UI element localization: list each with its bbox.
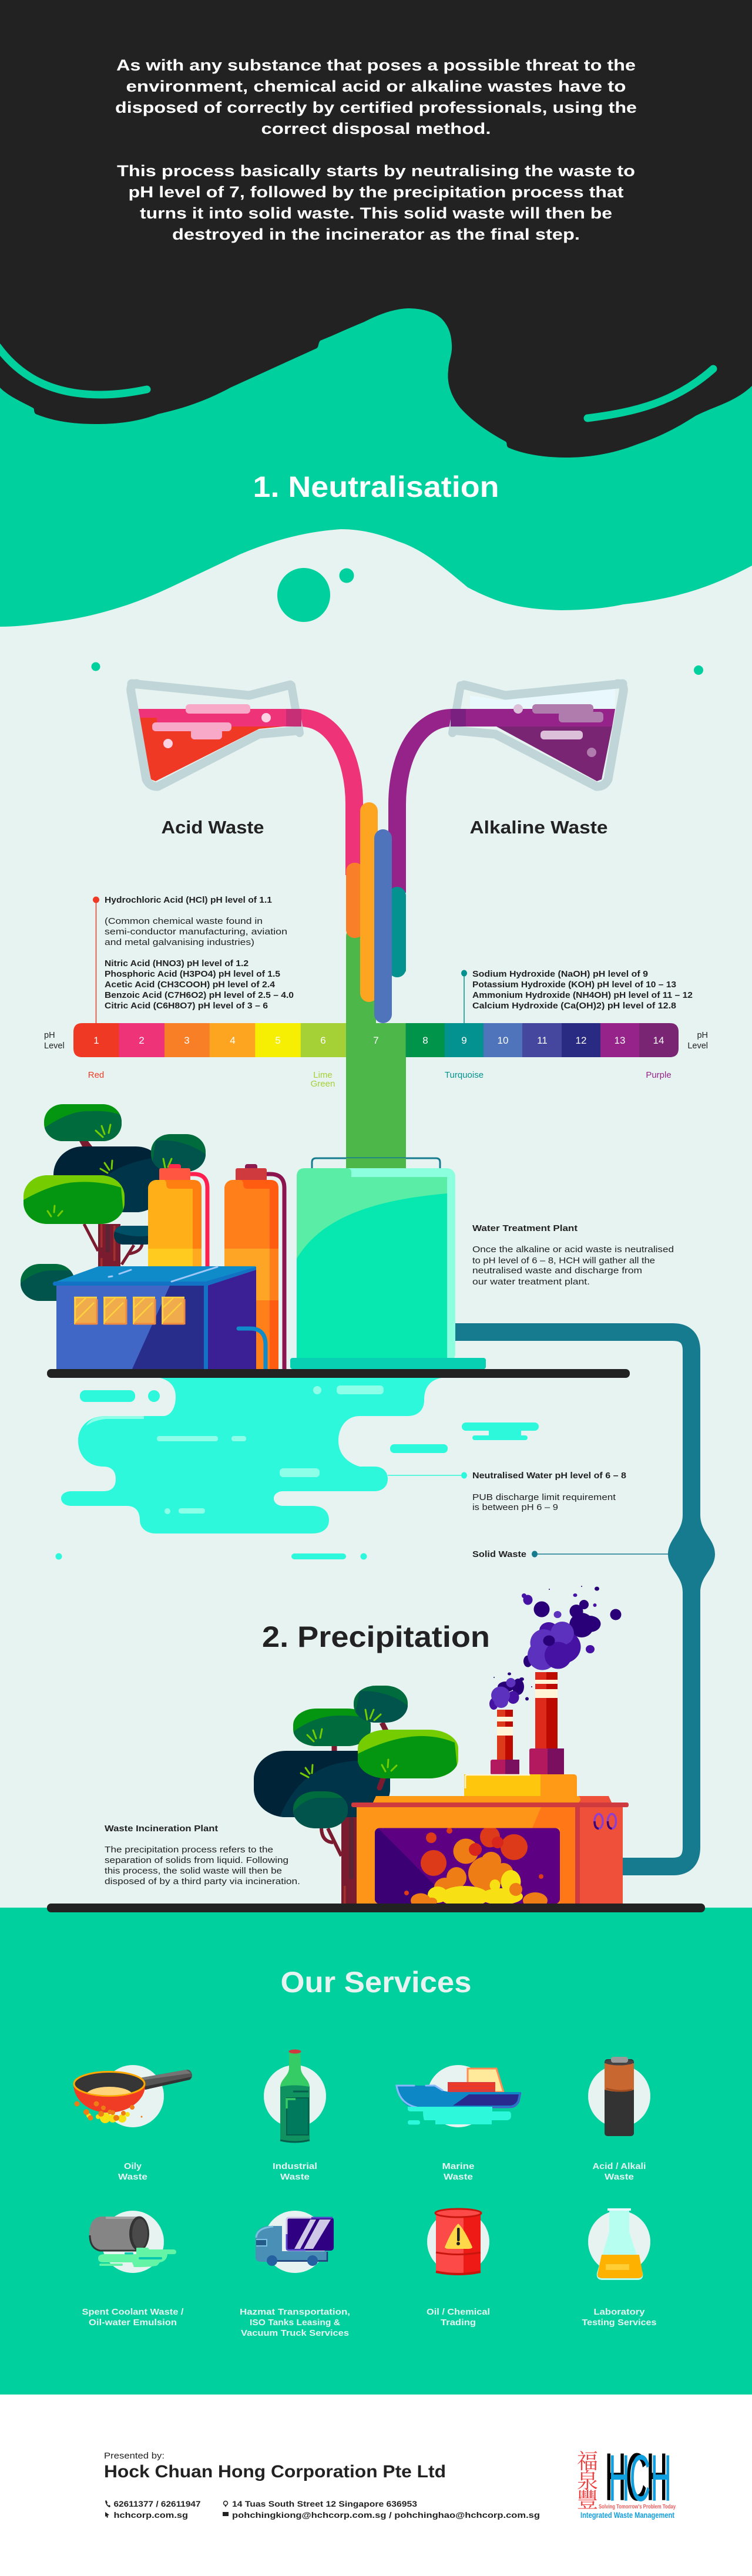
service labels row 2: Trading: [441, 2318, 476, 2328]
text: HCH: [609, 2442, 672, 2515]
accent arc left: [0, 347, 147, 395]
pH scale bar: 13: [615, 1035, 625, 1046]
heading: Acid Waste: Acid Waste: [161, 817, 264, 838]
icon: oily pan: [73, 2070, 192, 2123]
heading: 1. Neutralisation: 1. Neutralisation: [253, 470, 499, 503]
service labels row 1: Waste: [444, 2172, 473, 2182]
neutralised water callout: PUB discharge limit requirement: [472, 1493, 616, 1502]
waste incineration text: this process, the solid waste will then be: [105, 1867, 282, 1876]
pH scale bar: 3: [184, 1035, 190, 1046]
acid list with marker: Benzoic Acid (C7H6O2) pH level of 2.5 – 4.0: [105, 991, 294, 1000]
icon: marine ship: [397, 2069, 521, 2125]
service labels row 2: Hazmat Transportation,: [240, 2307, 350, 2317]
pH scale bar: 12: [576, 1035, 586, 1046]
waste incineration text: disposed of by a third party via incineration.: [105, 1877, 300, 1886]
water treatment plant text: Water Treatment Plant: [472, 1224, 578, 1233]
water treatment plant text: [472, 1224, 674, 1287]
intro text: [115, 56, 637, 243]
intro text: turns it into solid waste. This solid waste will then be: [140, 204, 612, 222]
footer: contact details: [105, 2499, 540, 2520]
intro text: correct disposal method.: [261, 120, 491, 137]
pH scale bar: 4: [230, 1035, 236, 1046]
footer: contact details: pohchingkiong@hchcorp.com.sg / pohchinghao@hchcorp.com.sg: [232, 2510, 540, 2520]
footer: contact details: hchcorp.com.sg: [114, 2510, 188, 2520]
alkaline list with marker: Ammonium Hydroxide (NH4OH) pH level of 11 – 12: [472, 991, 693, 1000]
droplets: [92, 568, 703, 675]
footer: HCH logo: Solving Tomorrow's Problem Today: [599, 2504, 676, 2510]
acid list with marker: Nitric Acid (HNO3) pH level of 1.2: [105, 959, 249, 968]
acid list with marker: Acetic Acid (CH3COOH) pH level of 2.4: [105, 980, 275, 990]
colour labels: [88, 1070, 672, 1089]
pH scale bar: 7: [373, 1035, 379, 1046]
pH level labels: [44, 1031, 708, 1051]
service labels row 1: Waste: [280, 2172, 310, 2182]
neutralised water puddle: [55, 1378, 539, 1560]
footer: HCH logo: Integrated Waste Management: [580, 2510, 674, 2520]
alkaline list with marker: Sodium Hydroxide (NaOH) pH level of 9: [472, 970, 648, 979]
neutralised water callout: Neutralised Water pH level of 6 – 8: [472, 1471, 626, 1481]
solid waste callout: Solid Waste: [472, 1550, 526, 1559]
service labels row 2: Oil / Chemical: [427, 2307, 490, 2317]
teal wave band: [0, 0, 752, 627]
footer: HCH logo: 福: [577, 2445, 598, 2475]
pH scale bar: [73, 1023, 679, 1057]
acid list with marker: semi-conductor manufacturing, aviation: [105, 927, 287, 937]
pH scale bar: 1: [93, 1035, 99, 1046]
footer: presented by: Presented by:: [104, 2451, 164, 2461]
service labels row 2: Testing Services: [582, 2318, 657, 2328]
acid list with marker: Phosphoric Acid (H3PO4) pH level of 1.5: [105, 970, 280, 979]
incineration plant: [351, 1774, 629, 1909]
water treatment tank: [290, 1158, 486, 1369]
water treatment plant text: to pH level of 6 – 8, HCH will gather all the: [472, 1256, 655, 1266]
acid list with marker: and metal galvanising industries): [105, 938, 254, 947]
pH scale bar: 11: [537, 1035, 548, 1046]
alkaline list with marker: Potassium Hydroxide (KOH) pH level of 10 – 13: [472, 980, 676, 990]
icon: spent coolant pipe: [89, 2217, 176, 2267]
water treatment plant text: neutralised waste and discharge from: [472, 1266, 642, 1276]
intro text: pH level of 7, followed by the precipitation process that: [128, 183, 624, 201]
trees: treatment plant: [21, 1104, 206, 1301]
pH scale bar: 6: [320, 1035, 326, 1046]
icon: hazmat truck: [256, 2217, 334, 2266]
icon: chemical drum: [435, 2209, 481, 2274]
icon: acid alkali cell: [605, 2057, 634, 2136]
accent arc right: [588, 369, 713, 418]
chimneys: [491, 1672, 564, 1775]
waste incineration text: Waste Incineration Plant: [105, 1824, 218, 1834]
pH level labels: Level: [44, 1041, 65, 1051]
pH scale bar: 10: [498, 1035, 508, 1046]
flask: alkaline waste: [451, 684, 623, 786]
colour labels: Turquoise: [445, 1070, 484, 1080]
intro text: This process basically starts by neutralising the waste to: [117, 162, 635, 180]
pH scale bar: 14: [653, 1035, 664, 1046]
footer: contact details: 14 Tuas South Street 12 Singapore 636953: [232, 2499, 417, 2508]
service labels row 1: [118, 2161, 646, 2182]
intro text: environment, chemical acid or alkaline wastes have to: [126, 78, 626, 95]
neutralised water callout: [388, 1471, 626, 1512]
waste incineration text: separation of solids from liquid. Following: [105, 1856, 288, 1865]
dark header shape: [0, 0, 752, 458]
service labels row 2: Spent Coolant Waste /: [82, 2307, 184, 2317]
alkaline list with marker: [461, 970, 693, 1023]
solid waste pipe: [455, 1332, 715, 1867]
waste incineration text: The precipitation process refers to the: [105, 1845, 273, 1855]
service labels row 2: ISO Tanks Leasing &: [250, 2318, 340, 2328]
footer: HCH logo: 豐: [577, 2484, 598, 2514]
service labels row 2: [82, 2307, 657, 2338]
acid list with marker: (Common chemical waste found in: [105, 917, 263, 926]
footer: company name: Hock Chuan Hong Corporation Pte Ltd: [104, 2462, 446, 2481]
icon: industrial bottle: [280, 2050, 310, 2143]
gas cylinders and pipes: [148, 1164, 284, 1369]
colour labels: Lime: [313, 1070, 333, 1080]
intro text: As with any substance that poses a possible threat to the: [116, 56, 636, 74]
acid list with marker: [93, 896, 294, 1023]
footer background: [0, 2395, 752, 2576]
alkaline list with marker: Calcium Hydroxide (Ca(OH)2) pH level of 12.8: [472, 1001, 676, 1011]
intro text: disposed of correctly by certified professionals, using the: [115, 99, 637, 116]
service labels row 1: Marine: [442, 2161, 475, 2171]
heading: Alkaline Waste: Alkaline Waste: [470, 817, 607, 838]
water treatment plant text: our water treatment plant.: [472, 1277, 590, 1287]
pH scale bar: 5: [275, 1035, 281, 1046]
colour labels: Purple: [646, 1070, 672, 1080]
trees: incineration plant: [254, 1686, 458, 1904]
main green stream into tank: [346, 1057, 406, 1169]
treatment building: [53, 1266, 266, 1369]
service labels row 2: Oil-water Emulsion: [89, 2318, 177, 2328]
pH level labels: pH: [44, 1031, 55, 1040]
service labels row 1: Industrial: [273, 2161, 317, 2171]
intro text: destroyed in the incinerator as the final step.: [172, 226, 580, 243]
footer: HCH logo: [577, 2440, 676, 2520]
colour labels: Red: [88, 1070, 104, 1080]
pH scale bar: 9: [461, 1035, 467, 1046]
text: HCH: [605, 2440, 667, 2514]
pH level labels: Level: [687, 1041, 708, 1051]
service backdrops: [102, 2065, 650, 2273]
service labels row 2: Vacuum Truck Services: [241, 2328, 349, 2338]
neutralised water callout: is between pH 6 – 9: [472, 1503, 558, 1512]
waste incineration text: [105, 1824, 300, 1886]
footer: contact details: 62611377 / 62611947: [114, 2499, 201, 2508]
service labels row 2: Laboratory: [593, 2307, 645, 2317]
service labels row 1: Waste: [118, 2172, 147, 2182]
water treatment plant text: Once the alkaline or acid waste is neutralised: [472, 1245, 674, 1255]
icon: laboratory flask: [597, 2208, 643, 2280]
heading: Our Services: Our Services: [281, 1966, 471, 1999]
pH scale bar: 2: [139, 1035, 145, 1046]
heading: 2. Precipitation: 2. Precipitation: [262, 1620, 490, 1653]
pH scale bar: 8: [422, 1035, 428, 1046]
service labels row 1: Oily: [124, 2161, 142, 2171]
smoke plumes: [489, 1586, 622, 1710]
acid list with marker: Citric Acid (C6H8O7) pH level of 3 – 6: [105, 1001, 268, 1011]
service labels row 1: Waste: [605, 2172, 634, 2182]
solid waste callout: [472, 1550, 670, 1559]
footer: HCH logo: 泉: [577, 2464, 598, 2494]
platform: incineration plant: [47, 1904, 705, 1912]
service labels row 1: Acid / Alkali: [592, 2161, 646, 2171]
flask: acid waste: [131, 684, 301, 786]
platform: treatment plant: [47, 1369, 630, 1378]
pH level labels: pH: [697, 1031, 708, 1040]
central mixed stream and tubes: [288, 718, 466, 1168]
acid list with marker: Hydrochloric Acid (HCl) pH level of 1.1: [105, 896, 272, 905]
colour labels: Green: [311, 1079, 335, 1089]
services panel background: [0, 1908, 752, 2395]
